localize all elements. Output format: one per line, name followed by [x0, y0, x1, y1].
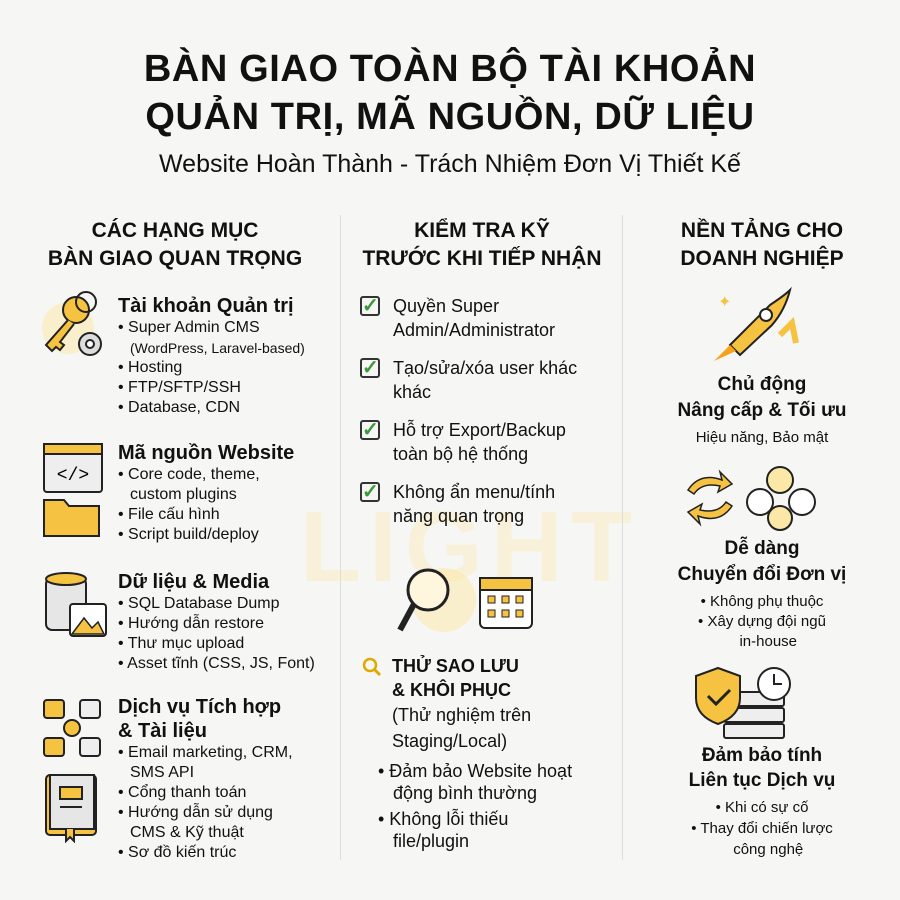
- column 3 header: NỀN TẢNG CHO: [681, 219, 843, 242]
- column 3 header: DOANH NGHIỆP: [680, 247, 844, 270]
- item: data & media: Dữ liệu & Media: [118, 571, 269, 593]
- item: integrations & docs: • Cổng thanh toán: [118, 784, 246, 801]
- column 3 header: [680, 218, 844, 270]
- column 1 header: [48, 218, 302, 270]
- section: backup test: động bình thường: [393, 783, 537, 803]
- check item 1: Quyền Super: [393, 296, 499, 316]
- icon: switch + people: [686, 466, 816, 531]
- section: backup test: Staging/Local): [392, 731, 507, 751]
- item: integrations & docs: SMS API: [130, 764, 194, 781]
- item: admin accounts: [118, 295, 305, 416]
- column 2 header: TRƯỚC KHI TIẾP NHẬN: [362, 247, 602, 270]
- block: easy switching: Chuyển đổi Đơn vị: [678, 564, 846, 585]
- column 2 header: KIỂM TRA KỸ: [414, 219, 550, 242]
- item: source code: • File cấu hình: [118, 506, 220, 523]
- section: backup test: file/plugin: [393, 831, 469, 851]
- item: admin accounts: (WordPress, Laravel-based): [130, 340, 305, 356]
- section: backup test: (Thử nghiệm trên: [392, 705, 531, 725]
- block: proactive: [678, 374, 846, 446]
- icon: code window + folder: </>: [57, 466, 89, 486]
- block: continuity: [689, 745, 835, 858]
- check item 1: [360, 295, 555, 340]
- item: integrations & docs: • Sơ đồ kiến trúc: [118, 844, 236, 861]
- block: continuity: công nghệ: [733, 841, 803, 858]
- item: data & media: • SQL Database Dump: [118, 595, 280, 612]
- section: backup test: [362, 655, 572, 851]
- item: data & media: • Thư mục upload: [118, 635, 244, 652]
- watermark: LIGHT: [300, 491, 640, 603]
- title line 2: QUẢN TRỊ, MÃ NGUỒN, DỮ LIỆU: [145, 96, 755, 138]
- section: backup test: • Đảm bảo Website hoạt: [378, 761, 572, 781]
- icon: magnifier + calendar: [397, 568, 533, 632]
- block: easy switching: Dễ dàng: [725, 538, 799, 559]
- block: continuity: • Khi có sự cố: [716, 799, 808, 816]
- check item 3: ✓: [362, 419, 379, 441]
- check item 4: [360, 481, 555, 526]
- block: proactive: Hiệu năng, Bảo mật: [696, 429, 828, 446]
- item: admin accounts: Tài khoản Quản trị: [118, 295, 294, 317]
- item: source code: Mã nguồn Website: [118, 442, 294, 464]
- icon: shield server clock: [695, 666, 791, 739]
- check item 4: Không ẩn menu/tính: [393, 482, 555, 502]
- icon: database + image: [45, 572, 107, 637]
- item: data & media: [118, 571, 315, 672]
- item: integrations & docs: • Email marketing, CRM,: [118, 744, 293, 761]
- checklist: [360, 295, 577, 526]
- check item 1: ✓: [362, 295, 379, 317]
- item: integrations & docs: [118, 696, 293, 861]
- section: backup test: THỬ SAO LƯU: [392, 656, 519, 676]
- block: continuity: Đảm bảo tính: [702, 745, 822, 766]
- block: easy switching: [678, 536, 846, 650]
- column 2 header: [362, 218, 602, 270]
- item: data & media: • Asset tĩnh (CSS, JS, Font): [118, 655, 315, 672]
- block: continuity: • Thay đổi chiến lược: [691, 820, 833, 837]
- check item 2: khác: [393, 382, 431, 402]
- check item 2: [360, 357, 577, 402]
- item: integrations & docs: CMS & Kỹ thuật: [130, 824, 244, 841]
- item: integrations & docs: & Tài liệu: [118, 720, 207, 742]
- section: backup test: • Không lỗi thiếu: [378, 809, 508, 829]
- block: easy switching: • Không phụ thuộc: [701, 593, 823, 610]
- icon: integrations: [43, 699, 101, 757]
- item: integrations & docs: Dịch vụ Tích hợp: [118, 696, 281, 718]
- icon: rocket: ✦: [718, 294, 731, 311]
- item: admin accounts: • Database, CDN: [118, 399, 240, 416]
- title: BÀN GIAO TOÀN BỘ TÀI KHOẢN: [144, 48, 756, 90]
- icon: rocket: [714, 286, 799, 361]
- item: integrations & docs: • Hướng dẫn sử dụng: [118, 804, 273, 821]
- check item 4: ✓: [362, 481, 379, 503]
- item: admin accounts: • FTP/SFTP/SSH: [118, 379, 241, 396]
- block: continuity: Liên tục Dịch vụ: [689, 770, 835, 791]
- item: source code: • Core code, theme,: [118, 466, 260, 483]
- item: admin accounts: • Super Admin CMS: [118, 319, 260, 336]
- section: backup test: & KHÔI PHỤC: [392, 680, 511, 700]
- item: source code: • Script build/deploy: [118, 526, 259, 543]
- item: data & media: • Hướng dẫn restore: [118, 615, 264, 632]
- check item 3: [360, 419, 566, 464]
- block: proactive: Nâng cấp & Tối ưu: [678, 400, 846, 421]
- check item 3: toàn bộ hệ thống: [393, 444, 528, 464]
- column 1 header: BÀN GIAO QUAN TRỌNG: [48, 247, 302, 270]
- check item 2: ✓: [362, 357, 379, 379]
- check item 3: Hỗ trợ Export/Backup: [393, 420, 566, 440]
- item: source code: [118, 442, 294, 543]
- icon: book: [45, 774, 97, 843]
- icon: code window + folder: [43, 443, 103, 537]
- check item 1: Admin/Administrator: [393, 320, 555, 340]
- check item 2: Tạo/sửa/xóa user khác: [393, 358, 577, 378]
- block: easy switching: in-house: [739, 633, 797, 650]
- icon: key: [42, 291, 102, 356]
- column 1 header: CÁC HẠNG MỤC: [92, 219, 258, 242]
- item: source code: custom plugins: [130, 486, 237, 503]
- block: proactive: Chủ động: [718, 374, 806, 395]
- block: easy switching: • Xây dựng đội ngũ: [698, 613, 826, 630]
- subtitle: Website Hoàn Thành - Trách Nhiệm Đơn Vị Thiết Kế: [159, 150, 741, 178]
- item: admin accounts: • Hosting: [118, 359, 182, 376]
- check item 4: năng quan trọng: [393, 506, 524, 526]
